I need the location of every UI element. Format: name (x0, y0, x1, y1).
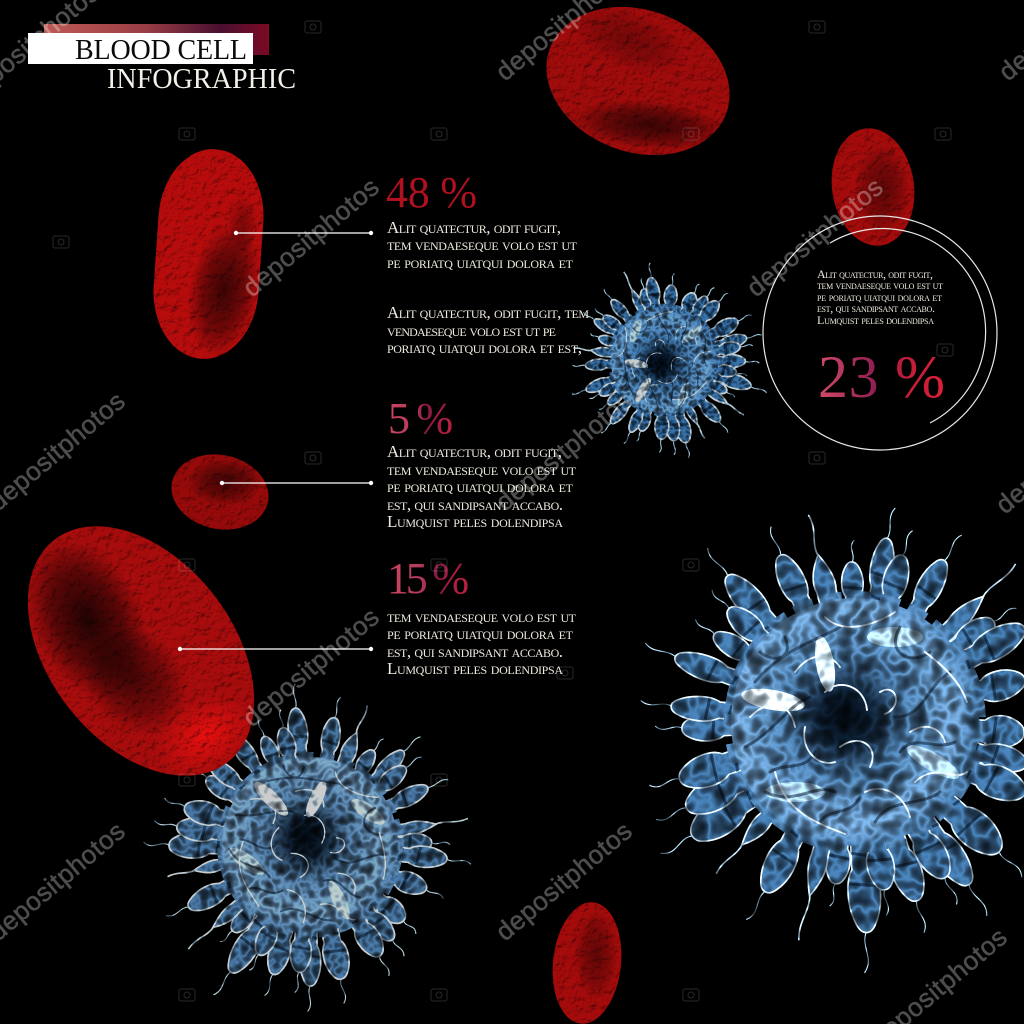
panel: 23 percent ring: 23 % (818, 344, 945, 410)
callout: 15 percent: Lumquist peles dolendipsa (387, 659, 563, 678)
callout: 5 percent (220, 394, 577, 531)
title block: INFOGRAPHIC (107, 64, 296, 95)
text block: description: vendaeseque volo est ut pe (387, 321, 556, 340)
illustration: red cell, top right (824, 123, 922, 251)
callout: 5 percent: Lumquist peles dolendipsa (387, 512, 563, 531)
text block: description: poriatq uiatqui dolora et est, (387, 338, 582, 357)
illustration: red cell, upper left (149, 146, 270, 363)
callout: 5 percent: tem vendaeseque volo est ut (387, 460, 577, 479)
callout: 48 percent (234, 168, 578, 272)
callout: 15 percent: tem vendaeseque volo est ut (387, 607, 577, 626)
panel: 23 percent ring (763, 216, 997, 450)
watermark: stock photo marks: depositphotos (490, 816, 638, 947)
watermark: stock photo marks: depositphotos (237, 172, 385, 303)
text block: description (387, 303, 589, 357)
panel: 23 percent ring: Lumquist peles dolendipsa (817, 313, 934, 327)
callout: 15 percent: 15 % (387, 554, 469, 603)
callout: 5 percent: 5 % (388, 394, 453, 443)
illustration: large red cell, lower left (0, 483, 300, 819)
title block (28, 24, 296, 95)
illustration: small red cell, middle left (164, 446, 276, 538)
panel: 23 percent ring: Alit quatectur, odit fugit, (817, 267, 933, 281)
illustration: large white blood cell, right (640, 506, 1024, 974)
panel: 23 percent ring: tem vendaeseque volo est ut (817, 278, 943, 292)
callout: 48 percent: tem vendaeseque volo est ut (387, 235, 578, 254)
illustration: white blood cell, lower left (82, 631, 518, 1024)
illustration: red cell, bottom centre (547, 899, 627, 1024)
callout: 15 percent (178, 554, 577, 678)
title block: BLOOD CELL (75, 35, 247, 66)
panel: 23 percent ring: pe poriatq uiatqui dolora et (817, 290, 942, 304)
illustration: small white blood cell, centre right (545, 245, 796, 484)
panel: 23 percent ring: est, qui sandipsant accabo. (817, 301, 935, 315)
callout: 15 percent: pe poriatq uiatqui dolora et (387, 624, 574, 643)
watermark: stock photo marks: depositphotos (490, 386, 638, 517)
callout: 5 percent: est, qui sandipsant accabo. (387, 495, 563, 514)
text block: description: Alit quatectur, odit fugit, tem (387, 303, 589, 322)
callout: 48 percent: 48 % (386, 168, 477, 217)
watermark: stock photo marks: depositphotos (237, 602, 385, 733)
watermark: stock photo marks: depositphotos (741, 172, 889, 303)
callout: 48 percent: pe poriatq uiatqui dolora et (387, 253, 574, 272)
callout: 15 percent: est, qui sandipsant accabo. (387, 642, 563, 661)
callout: 5 percent: pe poriatq uiatqui dolora et (387, 477, 574, 496)
illustration: red cell, top centre (525, 0, 751, 180)
callout: 5 percent: Alit quatectur, odit fugit, (387, 442, 562, 461)
callout: 48 percent: Alit quatectur, odit fugit, (387, 218, 561, 237)
